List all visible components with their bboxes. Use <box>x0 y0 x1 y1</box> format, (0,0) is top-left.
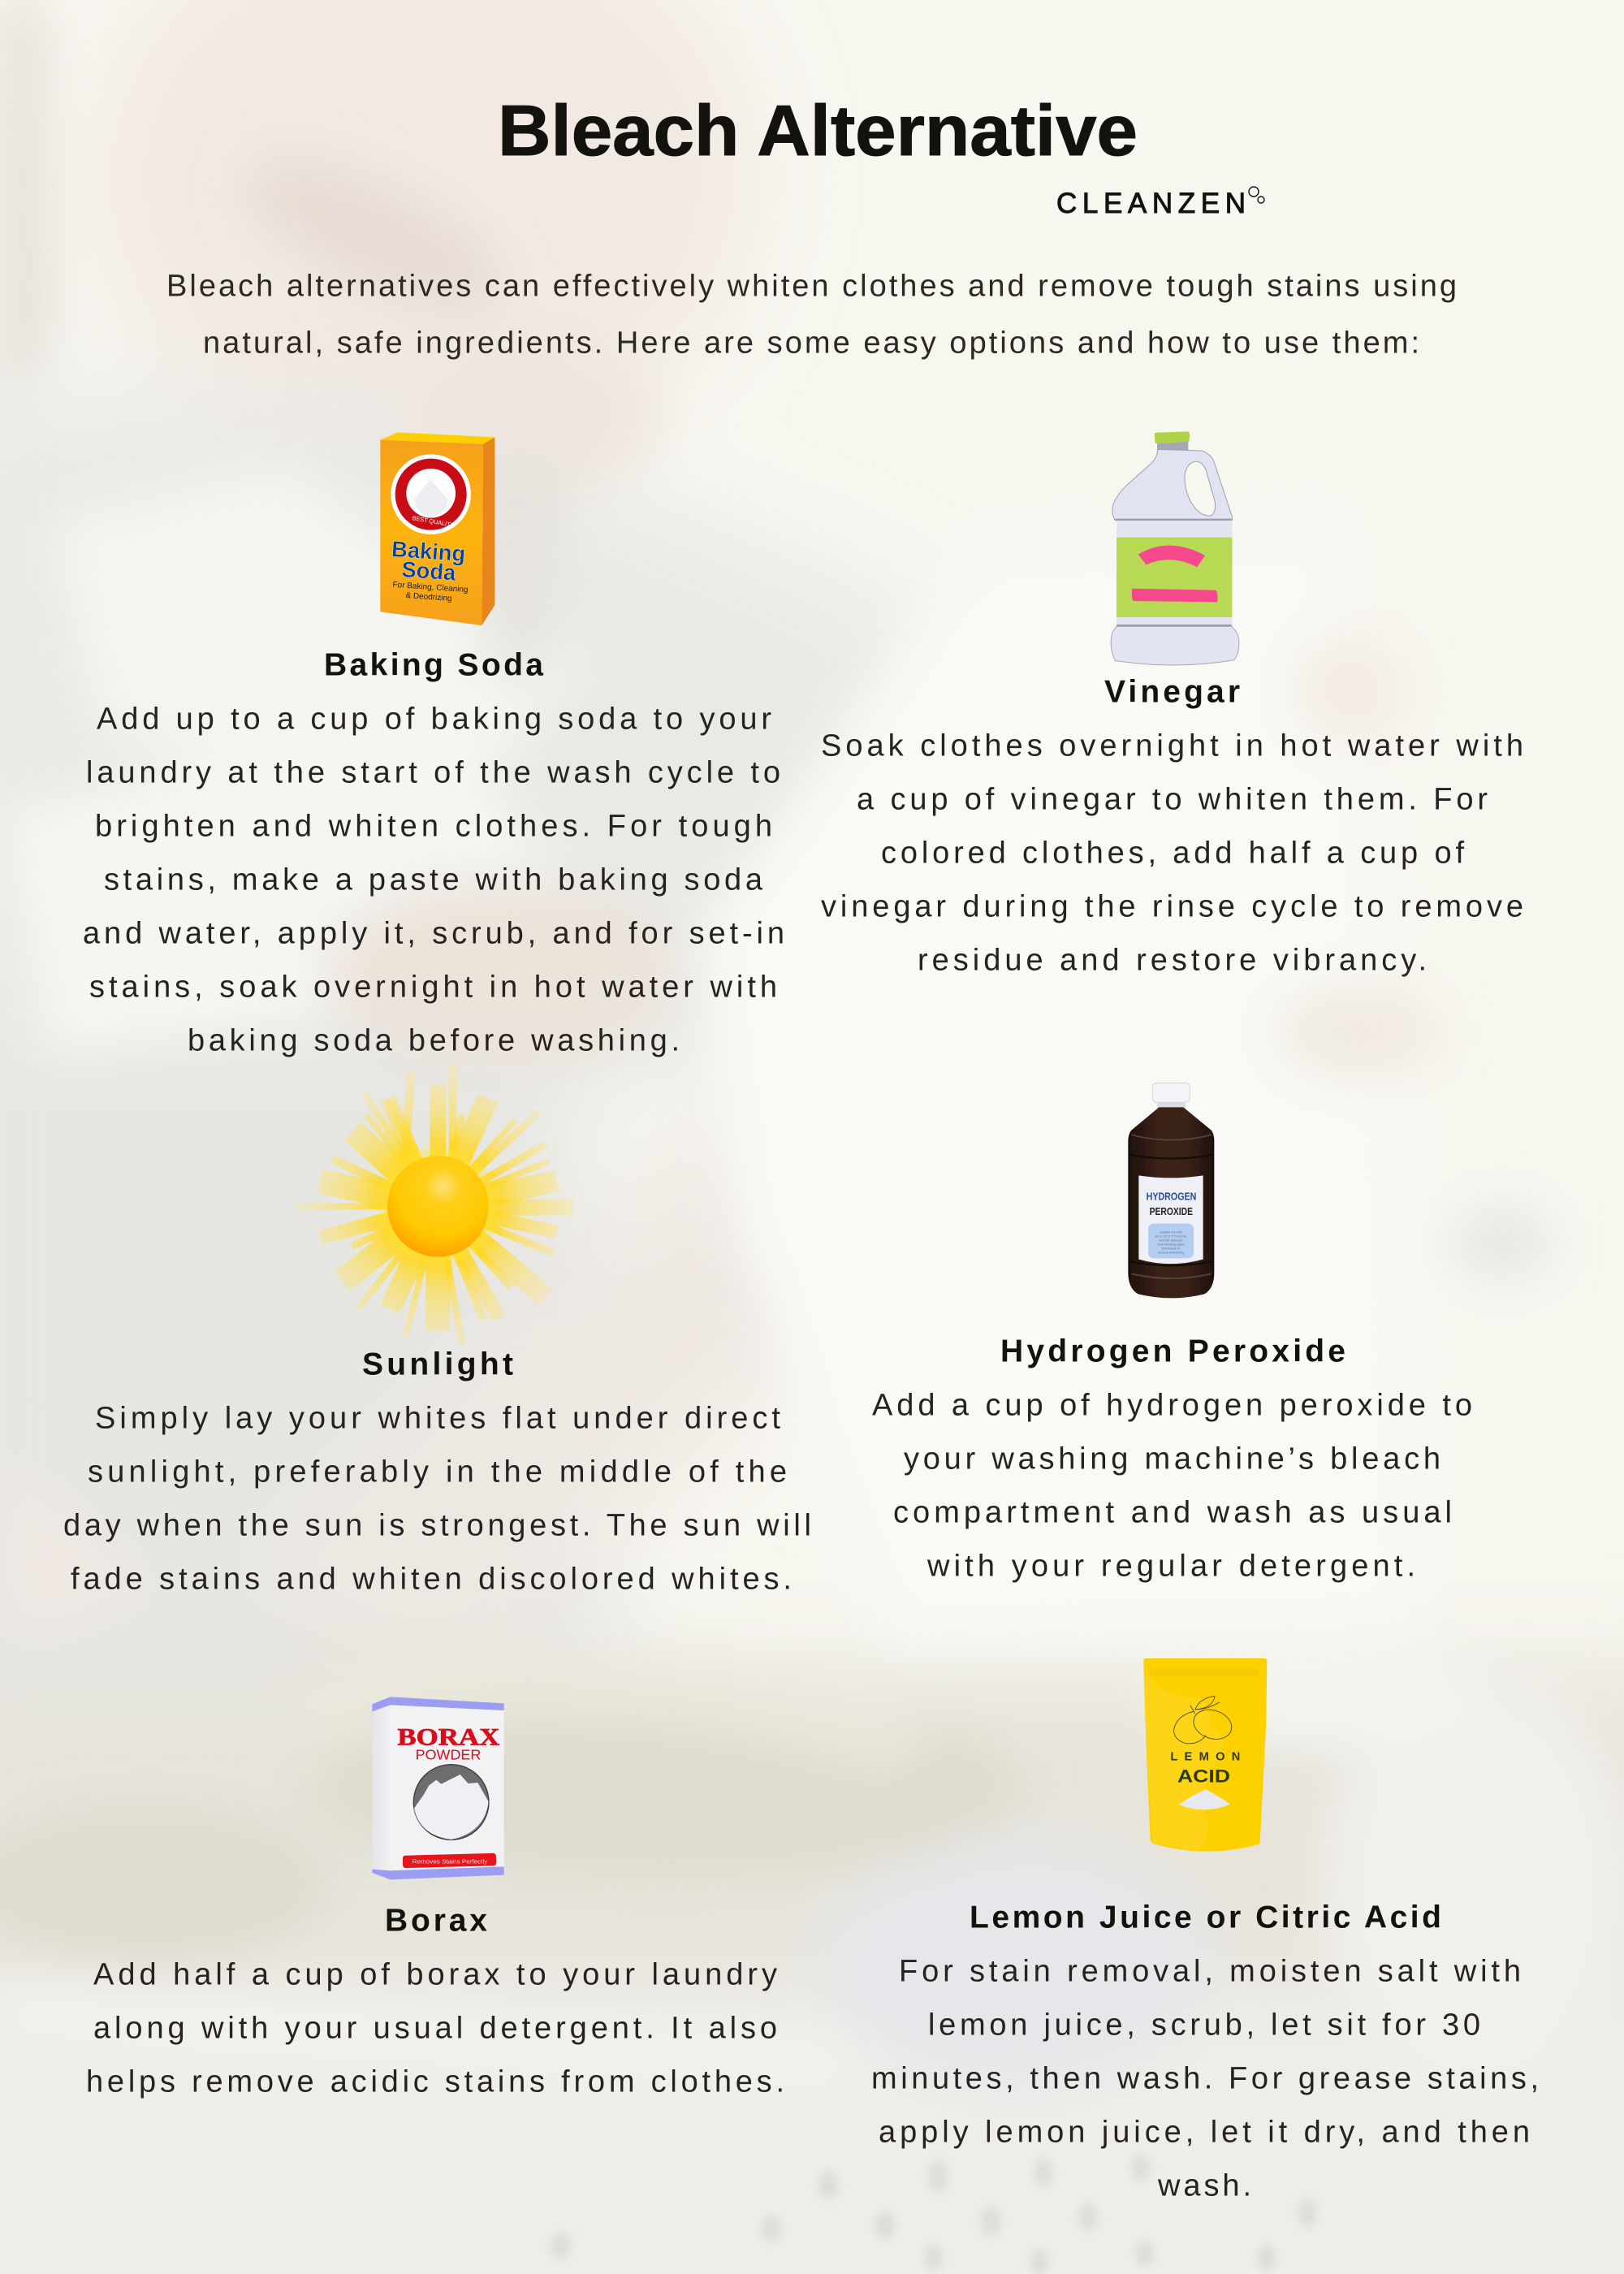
text: lemon juice instructions <box>871 1954 1539 2203</box>
text: baking soda instructions: and water, apply it, scrub, and for set-in <box>83 916 784 950</box>
text: hydrogen peroxide instructions: compartment and wash as usual <box>893 1496 1452 1530</box>
heading: hydrogen peroxide: Hydrogen Peroxide <box>1000 1334 1345 1369</box>
text: sunlight instructions: Simply lay your whites flat under direct <box>95 1402 780 1436</box>
icon: lemon acid pouch: ACID <box>1177 1766 1230 1786</box>
icon: hydrogen peroxide bottle: Oral debriding agent <box>1157 1243 1185 1246</box>
text: sunlight instructions: day when the sun is strongest. The sun will <box>63 1509 811 1543</box>
text: lemon juice instructions: minutes, then wash. For grease stains, <box>871 2061 1539 2095</box>
text: vinegar instructions: residue and restore vibrancy. <box>918 944 1427 978</box>
heading: sunlight: Sunlight <box>362 1347 513 1382</box>
text: borax instructions: Add half a cup of borax to your laundry <box>93 1957 777 1991</box>
icon: hydrogen peroxide bottle <box>1128 1083 1214 1298</box>
text: baking soda instructions: brighten and whiten clothes. For tough <box>95 809 772 843</box>
icon: borax box: POWDER <box>416 1747 481 1763</box>
icon: hydrogen peroxide bottle: PEROXIDE <box>1150 1206 1193 1217</box>
text: baking soda instructions <box>83 702 784 1057</box>
text: borax instructions: along with your usual detergent. It also <box>93 2011 777 2045</box>
text: lemon juice instructions: wash. <box>1157 2168 1251 2203</box>
panel: vinegar <box>821 431 1523 978</box>
text: sunlight instructions: sunlight, preferably in the middle of the <box>88 1455 787 1489</box>
panel: baking soda <box>83 432 784 1057</box>
heading: baking soda: Baking Soda <box>324 648 543 682</box>
icon: baking soda box: BEST QUALITY <box>412 514 455 529</box>
icon: borax box: Removes Stains Perfectly <box>412 1858 488 1865</box>
text: sunlight instructions <box>63 1402 811 1597</box>
icon: hydrogen peroxide bottle: Distributed for <box>1162 1247 1181 1250</box>
panel: lemon juice or citric acid <box>871 1658 1539 2203</box>
text: baking soda instructions: Add up to a cup of baking soda to your <box>97 702 771 736</box>
text: lemon juice instructions: apply lemon juice, let it dry, and then <box>879 2115 1530 2149</box>
panel: borax <box>86 1697 784 2099</box>
icon: hydrogen peroxide bottle: HYDROGEN <box>1147 1191 1196 1202</box>
title: Bleach Alternative <box>498 90 1138 171</box>
text: vinegar instructions: vinegar during the rinse cycle to remove <box>821 890 1523 924</box>
text: vinegar instructions: a cup of vinegar to whiten them. For <box>857 783 1488 817</box>
panel: hydrogen peroxide <box>872 1083 1472 1584</box>
logo: CleanZen: CLEANZEN <box>1056 188 1246 219</box>
text: sunlight instructions: fade stains and whiten discolored whites. <box>71 1563 792 1597</box>
text: vinegar instructions: colored clothes, add half a cup of <box>881 837 1464 871</box>
intro text: Bleach alternatives can effectively whiten clothes and remove tough stains using <box>166 270 1457 304</box>
text: baking soda instructions: stains, soak overnight in hot water with <box>89 970 777 1004</box>
icon: hydrogen peroxide bottle: General Distributing <box>1158 1251 1184 1254</box>
icon: hydrogen peroxide bottle: First aid antiseptic <box>1159 1239 1183 1242</box>
icon: baking soda box: Soda <box>401 556 457 586</box>
icon: sun <box>296 1063 573 1346</box>
intro text: natural, safe ingredients. Here are some easy options and how to use them: <box>203 326 1419 361</box>
text: vinegar instructions <box>821 729 1523 978</box>
intro text <box>166 270 1457 361</box>
text: baking soda instructions: baking soda before washing. <box>188 1023 680 1057</box>
text: baking soda instructions: stains, make a paste with baking soda <box>104 862 763 897</box>
text: vinegar instructions: Soak clothes overnight in hot water with <box>821 729 1523 763</box>
text: hydrogen peroxide instructions <box>872 1389 1472 1584</box>
text: lemon juice instructions: For stain removal, moisten salt with <box>899 1954 1521 1988</box>
icon: hydrogen peroxide bottle: 16 FL OZ (1 PT) 473 mL <box>1155 1234 1187 1238</box>
icon: borax box: BORAX <box>397 1725 499 1751</box>
text: baking soda instructions: laundry at the start of the wash cycle to <box>86 755 780 789</box>
text: borax instructions <box>86 1957 784 2099</box>
icon: vinegar jug <box>1111 431 1239 665</box>
icon: baking soda box: & Deodrizing <box>405 591 452 603</box>
icon: lemon acid pouch <box>1143 1658 1267 1852</box>
icon: lemon acid pouch: LEMON <box>1170 1750 1240 1763</box>
heading: vinegar: Vinegar <box>1104 674 1240 710</box>
text: hydrogen peroxide instructions: with your regular detergent. <box>926 1550 1415 1584</box>
icon: borax box <box>372 1697 504 1879</box>
text: borax instructions: helps remove acidic stains from clothes. <box>86 2064 784 2099</box>
panel: sunlight <box>63 1063 811 1597</box>
icon: baking soda box: Baking <box>391 536 466 566</box>
text: hydrogen peroxide instructions: Add a cup of hydrogen peroxide to <box>872 1389 1472 1423</box>
heading: lemon juice or citric acid: Lemon Juice or Citric Acid <box>970 1900 1441 1935</box>
text: lemon juice instructions: lemon juice, scrub, let sit for 30 <box>928 2008 1480 2042</box>
heading: borax: Borax <box>385 1904 487 1938</box>
icon: baking soda box <box>380 432 495 625</box>
icon: hydrogen peroxide bottle: Solution 3% USP <box>1160 1230 1183 1234</box>
text: hydrogen peroxide instructions: your washing machine’s bleach <box>904 1442 1440 1476</box>
icon: baking soda box: For Baking, Cleaning <box>392 581 469 594</box>
